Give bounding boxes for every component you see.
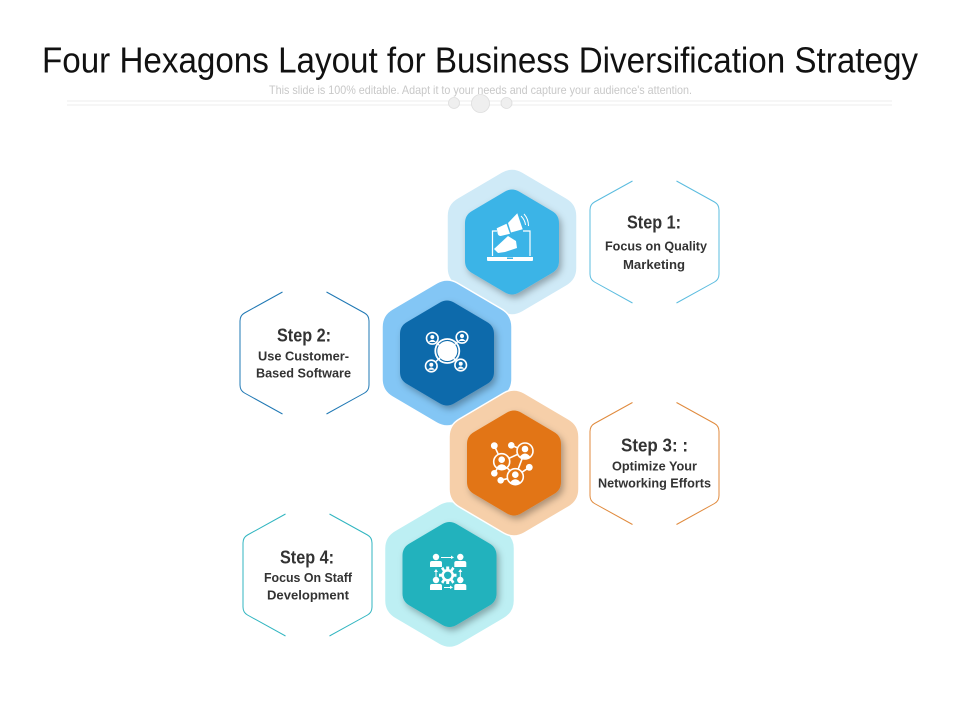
panel: step 2: Step 2:: [277, 326, 331, 346]
panel: step 3: Networking Efforts: [598, 476, 711, 490]
panel: step 4: Step 4:: [280, 548, 334, 568]
panel: step 4: Development: [267, 588, 350, 602]
hexagon 3: networking: [449, 390, 579, 536]
panel: step 1: [590, 181, 719, 303]
icon: laptop with megaphone: [487, 213, 533, 261]
icon: connected users: [426, 332, 468, 372]
hexagon 1: quality marketing: [447, 169, 577, 315]
panel: step 4: [243, 514, 372, 636]
header divider: [67, 94, 892, 112]
hexagon 2: customer software: [382, 280, 512, 426]
panel: step 3: Step 3: :: [621, 436, 688, 456]
panel: step 2: Use Customer-: [258, 348, 349, 364]
panel: step 3: [590, 402, 719, 524]
panel: step 3: Optimize Your: [612, 458, 697, 474]
panel: step 2: Based Software: [256, 366, 351, 380]
panel: step 2: [240, 292, 369, 414]
icon: team with gear: [430, 554, 466, 590]
hexagon 4: staff development: [384, 502, 514, 648]
subtitle: This slide is 100% editable. Adapt it to your needs and capture your audience's attention.: [269, 83, 692, 97]
panel: step 4: Focus On Staff: [264, 570, 353, 585]
panel: step 1: Marketing: [623, 257, 685, 272]
icon: people network: [491, 442, 533, 485]
panel: step 1: Focus on Quality: [605, 238, 708, 254]
panel: step 1: Step 1:: [627, 212, 681, 232]
